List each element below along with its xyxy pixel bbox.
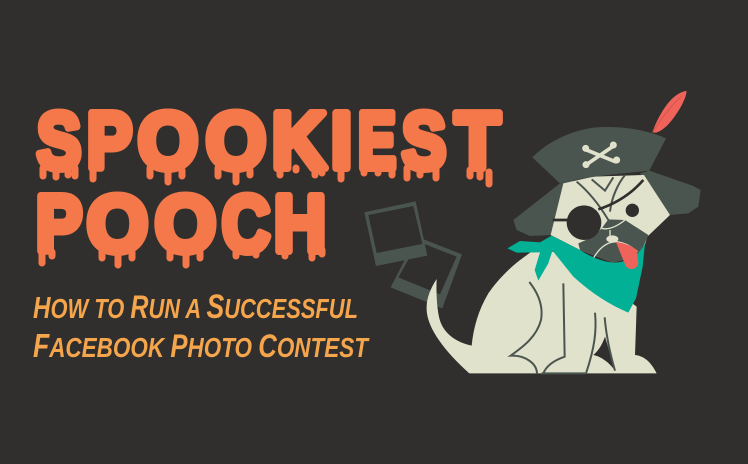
gap between legs <box>593 337 615 371</box>
title line: Pooch: C <box>222 179 270 268</box>
title line: Pooch: H <box>274 179 326 268</box>
icon: crossbones <box>584 143 618 166</box>
subtitle line 1: HOW TO RUN A SUCCESSFUL <box>33 288 358 326</box>
title line: Spookiest <box>37 96 500 185</box>
leg lines <box>511 282 615 373</box>
eye <box>626 204 639 217</box>
bandana <box>507 236 645 313</box>
subtitle line 2: FACEBOOK PHOTO CONTEST <box>33 327 370 364</box>
title line: Pooch: O <box>87 179 148 268</box>
illustration: pirate pug with photos <box>364 91 701 373</box>
dog head <box>551 175 670 263</box>
icon: front photo <box>364 201 427 266</box>
title line: Spookiest: O <box>138 96 198 185</box>
title <box>36 96 500 268</box>
feather <box>652 91 687 133</box>
pirate hat <box>532 127 666 183</box>
title line: Spookiest: T <box>455 96 500 185</box>
dog body <box>427 247 657 373</box>
muzzle <box>578 219 648 263</box>
title line: Spookiest: K <box>272 96 326 185</box>
face lines <box>577 175 625 220</box>
title line: Spookiest: S <box>402 96 446 185</box>
title line: Spookiest: E <box>358 96 396 185</box>
title line: Pooch <box>36 179 326 268</box>
title line: Pooch: O <box>155 179 216 268</box>
eyepatch <box>553 180 643 240</box>
title line: Pooch: P <box>36 179 82 268</box>
icon: back photo <box>391 237 462 308</box>
title line: Spookiest: S <box>37 96 81 185</box>
subtitle <box>33 288 370 364</box>
title line: Spookiest: I <box>331 96 352 185</box>
title line: Spookiest: P <box>87 96 132 185</box>
nose and mouth lines <box>593 220 637 258</box>
hat brim and ears <box>513 171 701 236</box>
title line: Spookiest: O <box>206 96 266 185</box>
tongue <box>616 242 638 269</box>
